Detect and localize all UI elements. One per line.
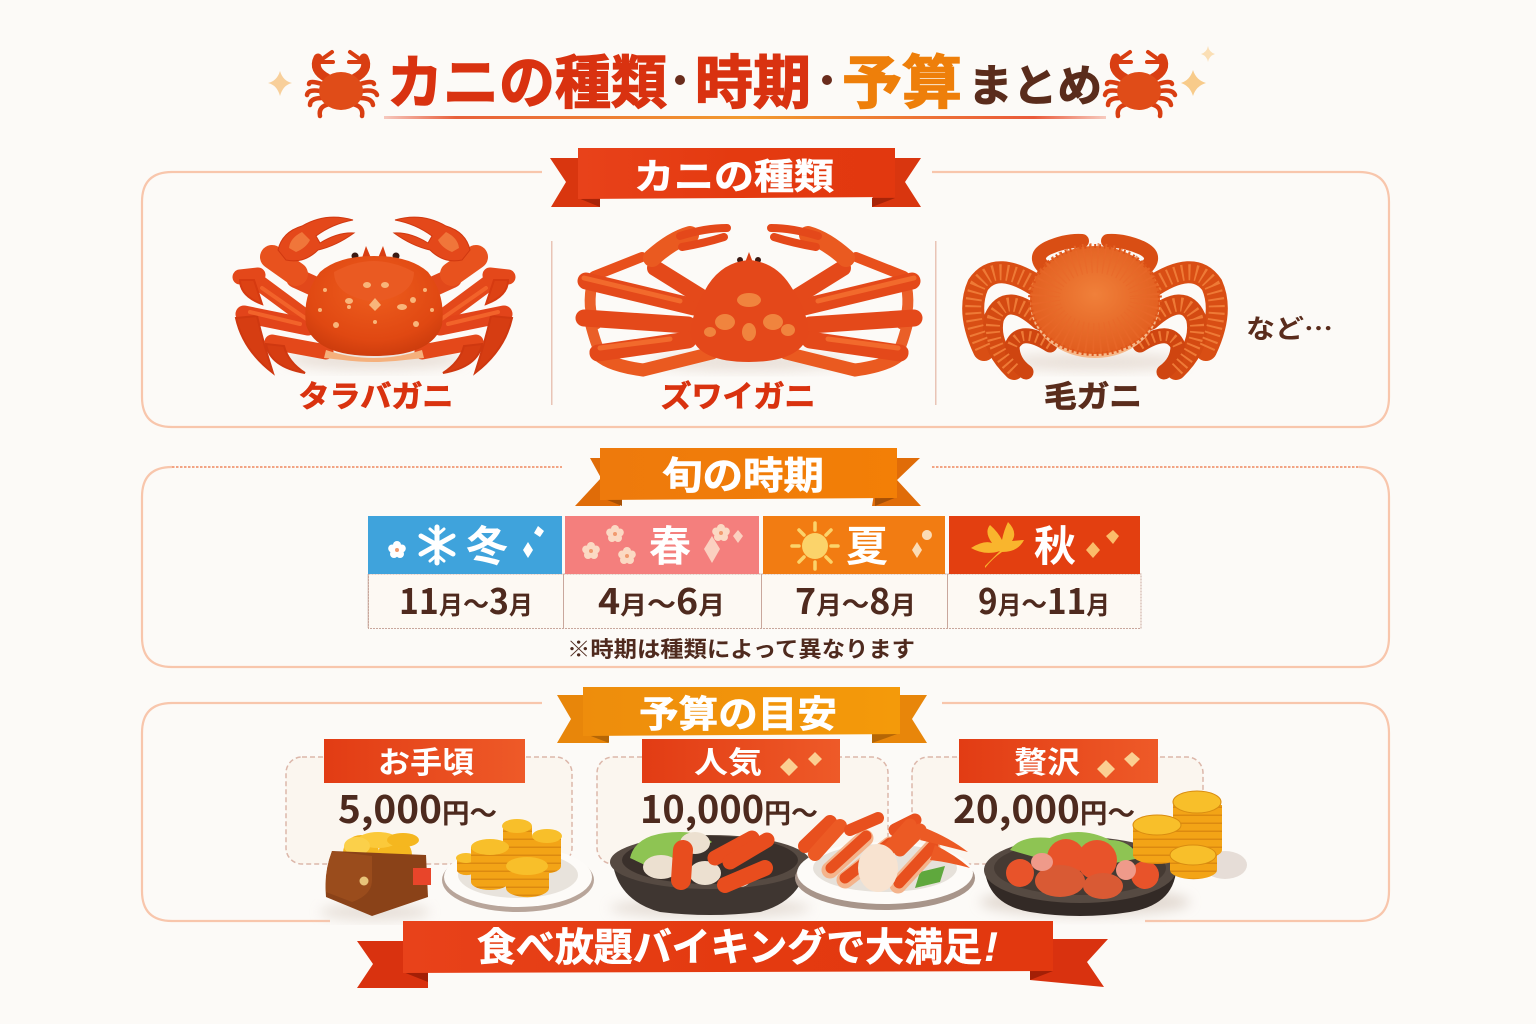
card: affordable (286, 738, 572, 864)
king crab shell (305, 246, 443, 362)
panel frame (142, 467, 1389, 667)
hair crab shell (1030, 246, 1160, 358)
icon: maple leaf (971, 522, 1024, 568)
label: king crab: タラバガニ (298, 372, 454, 416)
spring small flower (712, 524, 730, 541)
winter months: 11月～3月 (399, 574, 533, 625)
banner exclamation: ! (984, 923, 998, 970)
king crab left legs (236, 217, 354, 373)
label: etc: など… (1246, 309, 1333, 346)
ribbon: budget heading (557, 684, 927, 743)
icon: title crab left (307, 52, 377, 116)
season note: ※時期は種類によって異なります (567, 632, 915, 664)
panel frame (142, 172, 1389, 427)
divider (935, 241, 936, 405)
illustration: plate of coins (442, 819, 594, 912)
autumn sparkles (1086, 530, 1119, 558)
snow crab shell (691, 252, 808, 362)
illustration: plate of crab legs (795, 818, 975, 910)
ribbon: season heading (575, 445, 921, 506)
column: winter (368, 513, 562, 628)
icon: snowflake (421, 527, 453, 563)
summer sparkles (912, 530, 932, 558)
tag: popular (642, 739, 840, 783)
title text timing: 時期 (695, 36, 811, 120)
title text ending: まとめ (968, 50, 1102, 114)
ribbon: budget heading: 予算の目安 (639, 684, 837, 738)
spring character: 春 (649, 513, 691, 574)
title (268, 36, 1215, 120)
title underline (384, 116, 1106, 119)
column: autumn (947, 513, 1140, 628)
banner: all-you-can-eat: 食べ放題バイキングで大満足 (477, 917, 982, 973)
illustration: wallet with coins (320, 832, 431, 920)
column: spring (563, 513, 759, 628)
panel dotted top line (172, 466, 1359, 468)
illustration: luxury crab dish (980, 832, 1190, 916)
ribbon: crab types heading (550, 148, 921, 207)
tag: luxury (959, 739, 1158, 783)
illustration: hair crab (973, 241, 1217, 372)
illustration: king crab (236, 217, 512, 373)
season table (368, 513, 1141, 628)
panel: peak season (142, 445, 1389, 667)
autumn months: 9月～11月 (978, 574, 1110, 625)
panel frame (142, 703, 1389, 921)
tag sparkles (1097, 752, 1140, 778)
autumn character: 秋 (1034, 513, 1076, 574)
card: popular (597, 738, 888, 864)
snow crab left legs (584, 228, 727, 370)
column: summer (761, 513, 945, 628)
snow crab right legs (771, 228, 914, 370)
tag sparkles (780, 752, 822, 776)
winter character: 冬 (466, 513, 508, 574)
icon: title crab right (1105, 52, 1175, 116)
summer months: 7月～8月 (795, 574, 916, 625)
illustration: pot of crab (610, 832, 810, 918)
winter sparkle (523, 526, 544, 558)
illustration: luxury coin stacks (1133, 791, 1247, 879)
ribbon: season heading: 旬の時期 (662, 445, 824, 500)
panel: crab types (142, 148, 1389, 427)
title text: カニの種類 (387, 36, 667, 120)
ribbon: crab types heading: カニの種類 (634, 148, 834, 200)
tag text: お手頃 (378, 738, 474, 782)
spring sparkles (704, 530, 743, 563)
icon: blossoms (582, 525, 636, 564)
tag text: 人気 (694, 738, 762, 782)
panel: budget (142, 684, 1389, 921)
label: snow crab: ズワイガニ (660, 372, 816, 416)
season table body (368, 574, 1141, 628)
sparkle right large (1181, 70, 1206, 96)
divider (551, 241, 552, 405)
title dot (675, 75, 685, 85)
tag: affordable (324, 739, 525, 783)
hair crab right legs (1108, 241, 1217, 372)
king crab right legs (394, 217, 512, 373)
label: hair crab: 毛ガニ (1044, 372, 1142, 416)
spring months: 4月～6月 (598, 574, 725, 625)
summer character: 夏 (846, 513, 888, 574)
icon: sun (792, 523, 838, 569)
price: 10,000円～ (640, 779, 818, 834)
illustration: snow crab (584, 228, 914, 371)
sparkle left (268, 71, 292, 96)
winter flake small (388, 541, 406, 558)
price: 20,000円～ (953, 779, 1135, 834)
banner: all-you-can-eat (357, 917, 1108, 988)
sparkle right small (1201, 46, 1215, 62)
hair crab left legs (973, 241, 1082, 372)
title text budget: 予算 (842, 36, 962, 120)
card: luxury (912, 738, 1203, 864)
tag text: 贅沢 (1014, 738, 1080, 782)
price: 5,000円～ (338, 779, 497, 834)
title dot (822, 75, 832, 85)
